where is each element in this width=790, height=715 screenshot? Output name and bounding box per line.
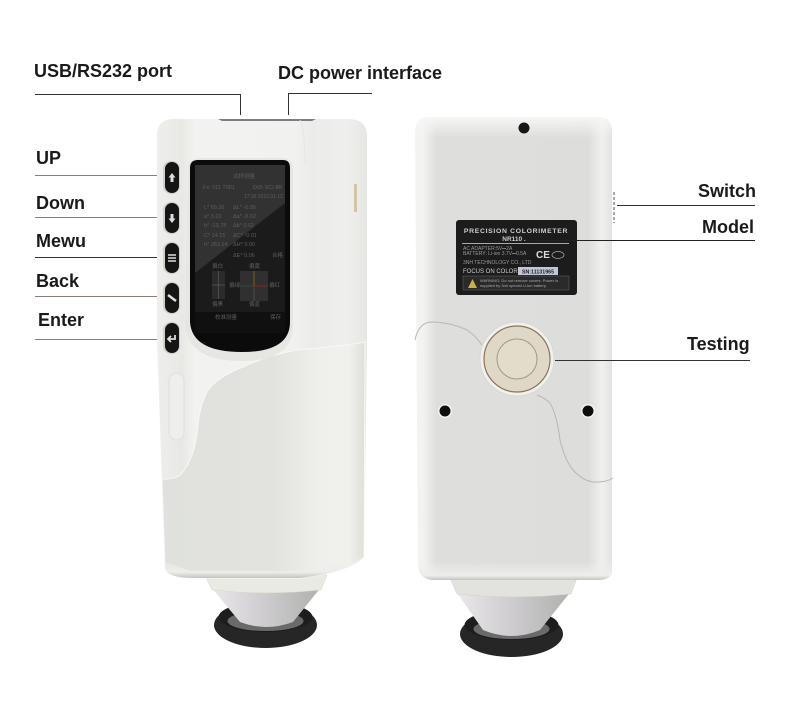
screen: measurement display: 校准测量 [215,313,238,321]
screen: measurement display: 偏红 [269,281,281,289]
bottom light edge [418,562,612,580]
bottom shading [165,554,364,578]
screen: measurement display: h* 283.14 [204,242,228,248]
screw hole: right [581,404,595,418]
screw hole: left [438,404,452,418]
callout: Down: Down [36,193,85,213]
model label: SN:11131965 [522,270,554,276]
screen: measurement display: ΔH* 0.00 [233,242,255,248]
button: up [163,161,180,194]
casing: front body [157,119,367,578]
callout: Switch [617,181,756,206]
test button [480,322,554,396]
lower shell seam [415,322,613,482]
model label: FOCUS ON COLOR [463,269,518,275]
model label: supplied by 3nh special Li-ion battery. [480,283,547,288]
ring: front knurled collar [205,575,327,593]
callout: UP [35,148,157,176]
screen: measurement display: Δb* 0.02 [233,223,254,229]
screen: measurement display: 试样测量 [233,172,256,180]
groove: side slot [169,373,184,440]
callout: Down [35,193,157,218]
model label: BATTERY: Li-ion 3.7V⎓0.5A [463,251,527,257]
callout: DC power interface: DC power interface [278,63,442,83]
callout: DC power interface [278,63,442,115]
model label [456,220,577,295]
callout: Back [35,271,157,296]
screen surround [185,158,293,361]
screen: measurement display: D65 SCI 8B [253,185,282,191]
screen: measurement display: Fx: 011 T001 [203,185,235,191]
button: menu [163,242,180,274]
model label: AC ADAPTER:5V⎓2A [463,246,513,252]
switch nub [613,192,615,223]
button: back [163,282,180,314]
screen: measurement display: a* 3.22 [204,214,221,220]
screen: measurement display: ΔE* 0.06 [233,253,255,259]
callout: Mewu [35,231,157,258]
screen: measurement display: ΔC* -0.01 [233,233,257,239]
model label: CE [536,250,550,261]
screen: measurement display [195,165,285,333]
screen: measurement display: 偏黄 [249,262,261,270]
callout: Switch: Switch [698,181,756,201]
callout: Enter: Enter [38,310,84,330]
model label: WARNING: Do not remove covers. Power is [480,278,558,283]
screen bezel [190,160,290,352]
screen: measurement display: b* -13.78 [204,223,226,229]
screen: measurement display: 偏蓝 [249,300,261,308]
screen: measurement display: 偏白 [212,262,223,270]
device: front view [157,119,367,648]
button: enter [163,322,180,354]
callout: Enter [35,310,157,340]
top edge: ports [218,119,316,121]
model label: NR110 . [502,236,526,243]
cone: back nozzle [455,590,572,636]
screen: measurement display: 偏绿 [229,281,241,289]
callout: Back: Back [36,271,80,291]
lower shell [162,342,365,578]
model label: 3NH TECHNOLOGY CO., LTD [463,260,532,266]
ring: back knurled collar [450,578,577,597]
screen: measurement display: 合格 [272,251,284,259]
screen: measurement display: 保存 [270,313,282,321]
model label: PRECISION COLORIMETER [464,228,568,235]
callout: Mewu: Mewu [36,231,86,251]
button: down [163,202,180,234]
screen: measurement display: 17:36 2012.01.12 [244,194,283,200]
cone: front nozzle [210,586,322,627]
screen: measurement display: Δa* -0.02 [233,214,256,220]
screw hole: top [518,122,530,134]
callout: USB/RS232 port [34,61,240,115]
screen: measurement display: C* 14.15 [204,233,225,239]
cap: back black base [460,610,563,657]
cap: front black base [214,602,317,648]
screen: measurement display: 偏黑 [212,300,224,308]
side seam [300,120,305,165]
casing: back body [415,117,612,580]
callout: Testing: Testing [687,334,750,354]
switch slot [354,184,357,212]
callout: Model: Model [702,217,754,237]
top light edge [415,117,612,138]
device: back view [415,117,614,657]
callout: UP: UP [36,148,61,168]
screen: measurement display: L* 69.26 [204,205,224,211]
screen: measurement display: ΔL* -0.05 [233,205,256,211]
callout: USB/RS232 port: USB/RS232 port [34,61,172,81]
